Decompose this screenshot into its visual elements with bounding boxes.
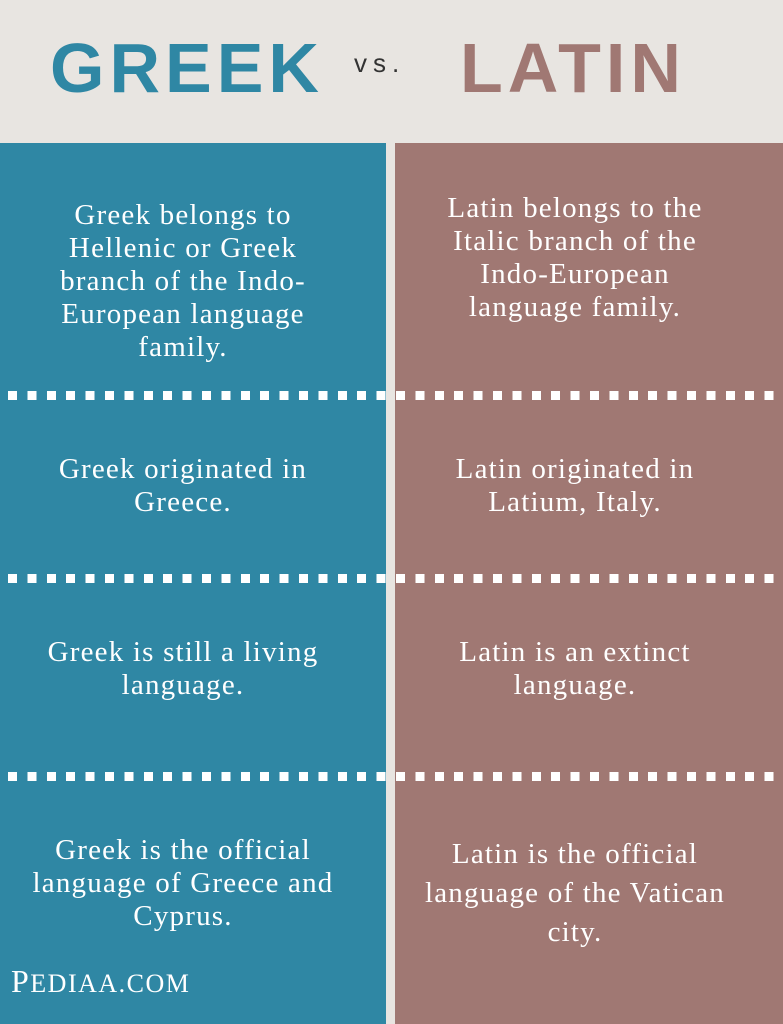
text: latin extinct <box>459 636 691 701</box>
title: GREEK: GREEK <box>50 29 324 107</box>
text: greek living: Greek is still a living <box>48 636 318 668</box>
text: greek branch: family. <box>138 331 228 363</box>
text: latin origin: Latium, Italy. <box>488 486 662 518</box>
panel: latin column <box>395 143 783 1024</box>
text: latin extinct: language. <box>514 669 636 701</box>
text: greek origin: Greek originated in <box>59 453 307 485</box>
text: greek official: Cyprus. <box>133 900 233 932</box>
text: greek official: Greek is the official <box>55 834 311 866</box>
panel: greek column <box>0 143 386 1024</box>
text: greek branch <box>60 199 306 363</box>
text: greek official: language of Greece and <box>33 867 333 899</box>
text: latin extinct: Latin is an extinct <box>459 636 691 668</box>
text: greek official <box>33 834 333 932</box>
divider 2 <box>0 574 783 583</box>
text: latin official <box>425 838 725 948</box>
text: latin official: language of the Vatican <box>425 877 725 909</box>
title: LATIN: LATIN <box>460 29 686 107</box>
divider 1 <box>0 391 783 400</box>
text: greek branch: Greek belongs to <box>74 199 292 231</box>
text: greek living: language. <box>122 669 244 701</box>
divider 3 <box>0 772 783 781</box>
text: greek origin <box>59 453 307 518</box>
text: latin branch <box>447 192 703 323</box>
text: greek branch: European language <box>61 298 305 330</box>
text: latin origin <box>456 453 694 518</box>
title: vs.: vs. <box>354 48 405 78</box>
text: greek branch: branch of the Indo- <box>60 265 306 297</box>
text: latin branch: language family. <box>469 291 681 323</box>
text: latin official: Latin is the official <box>452 838 698 870</box>
text: latin origin: Latin originated in <box>456 453 694 485</box>
text: greek branch: Hellenic or Greek <box>69 232 297 264</box>
text: greek origin: Greece. <box>134 486 232 518</box>
text: latin branch: Latin belongs to the <box>447 192 703 224</box>
text: latin official: city. <box>548 916 602 948</box>
text: latin branch: Indo-European <box>480 258 670 290</box>
text: greek living <box>48 636 318 701</box>
footer: pediaa.com: PEDIAA.COM <box>11 963 190 999</box>
text: latin branch: Italic branch of the <box>453 225 697 257</box>
